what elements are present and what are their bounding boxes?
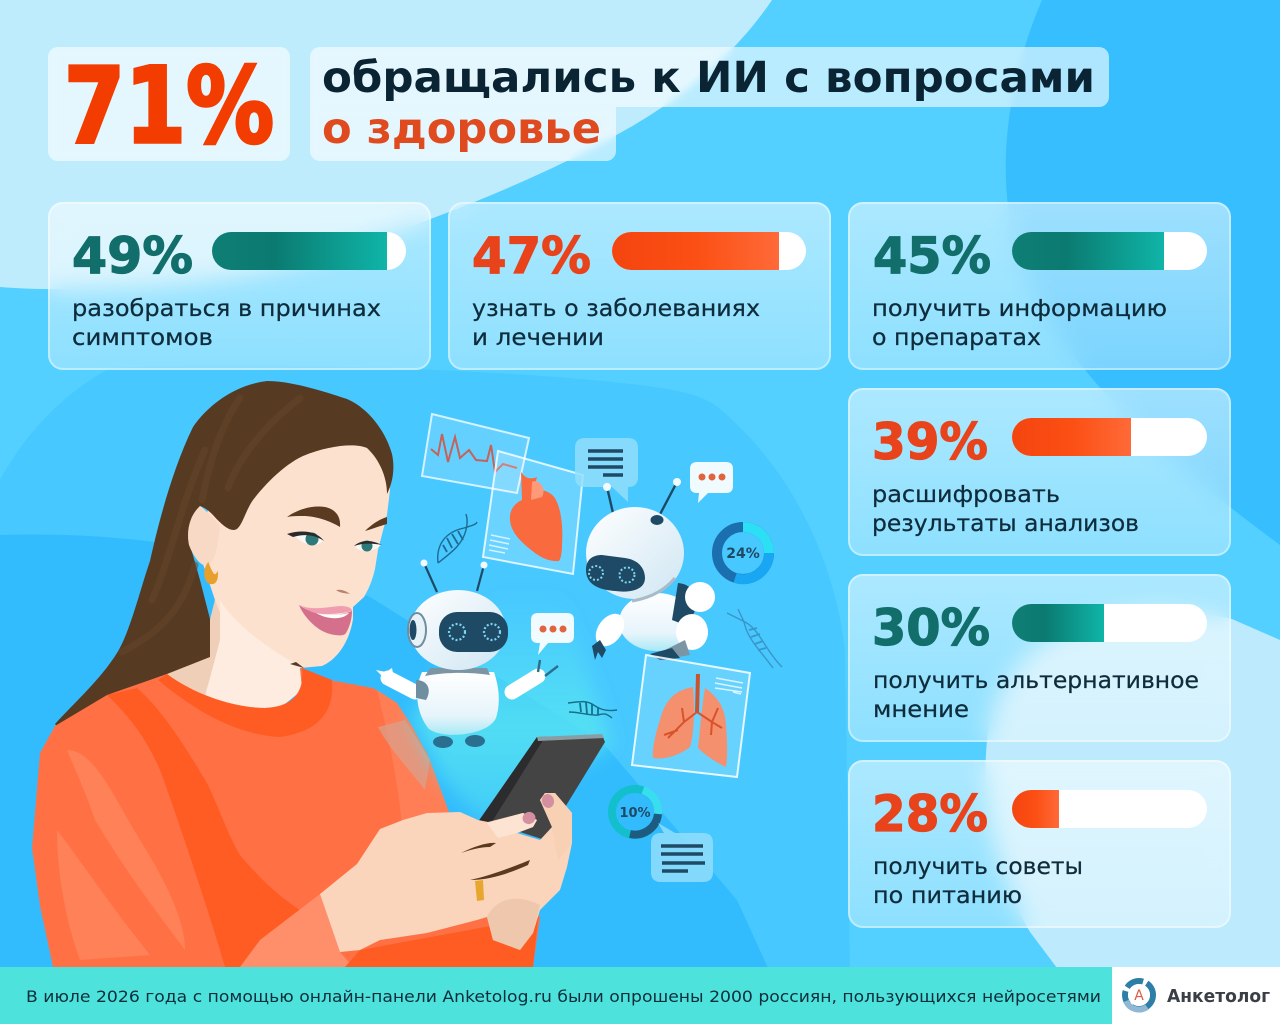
- card: 30%: мнение: [873, 697, 969, 723]
- title: обращались к ИИ с вопросами: [322, 53, 1095, 103]
- phone light glow: [412, 590, 612, 820]
- card: 39%: [848, 388, 1231, 556]
- donut 10%: [612, 789, 658, 835]
- title: о здоровье: [322, 104, 601, 154]
- card: 47%: и лечении: [472, 325, 604, 351]
- ECG card: [422, 414, 529, 493]
- donut 24%: 24%: [726, 546, 760, 562]
- card: 49%: [48, 202, 431, 370]
- headline stat box: 71%: 71%: [64, 45, 274, 167]
- card: 45%: о препаратах: [872, 325, 1041, 351]
- lungs card: [632, 655, 750, 777]
- card: 28%: по питанию: [873, 883, 1022, 909]
- woman: ear and earring: [188, 506, 220, 583]
- eyes: [287, 532, 382, 552]
- card: 28%: 28%: [872, 785, 988, 843]
- card: 49%: 49%: [72, 227, 193, 285]
- footer logo: Анкетолог: Анкетолог: [1167, 986, 1270, 1007]
- card: 47%: 47%: [472, 227, 591, 285]
- speech bubble with text lines bottom: [651, 823, 713, 882]
- card: 39%: расшифровать: [872, 482, 1060, 508]
- card: 49%: симптомов: [72, 325, 213, 351]
- woman: hand holding phone: [320, 793, 572, 952]
- title line 2 background: [310, 107, 616, 161]
- DNA helix top: [438, 514, 477, 563]
- mouth: [299, 605, 352, 635]
- heart card: [483, 451, 583, 574]
- footer note: В июле 2026 года с помощью онлайн-панели Anketolog.ru были опрошены 2000 россиян, пользующихся нейросетями: [26, 987, 1101, 1006]
- card: 30%: [848, 574, 1231, 742]
- DNA helix middle: [568, 702, 617, 718]
- woman: hair: [55, 381, 393, 730]
- robot 2: [586, 478, 715, 660]
- card: 28%: [848, 760, 1231, 928]
- nose: [336, 590, 350, 594]
- donut 24%: [717, 527, 769, 579]
- woman: face and neck: [160, 440, 390, 708]
- card: 45%: [848, 202, 1231, 370]
- title: [322, 53, 1095, 154]
- robot 1: [376, 560, 558, 748]
- phone: [478, 734, 605, 840]
- DNA helix right: [727, 609, 782, 668]
- card: 47%: узнать о заболеваниях: [472, 296, 760, 322]
- card: 39%: 39%: [872, 413, 988, 471]
- eyebrows: [287, 506, 387, 531]
- card: 28%: получить советы: [873, 854, 1083, 880]
- title line 1 background: [310, 47, 1109, 107]
- footer logo: Анкетолог: [1112, 967, 1280, 1024]
- card: 45%: получить информацию: [872, 296, 1167, 322]
- card: 47%: [448, 202, 831, 370]
- card: 45%: 45%: [873, 227, 991, 285]
- woman: orange sweater: [32, 668, 540, 967]
- speech bubble with dots top right: [690, 462, 733, 503]
- card: 49%: разобраться в причинах: [72, 296, 381, 322]
- card: 30%: получить альтернативное: [873, 668, 1199, 694]
- card: 39%: результаты анализов: [872, 511, 1139, 537]
- footer logo: Анкетолог: А: [1134, 988, 1144, 1004]
- donut 10%: 10%: [619, 806, 651, 821]
- footer note: [0, 967, 1112, 1024]
- speech bubble with dots centre: [531, 613, 574, 655]
- speech bubble with text lines: [575, 438, 638, 502]
- card: 30%: 30%: [872, 599, 990, 657]
